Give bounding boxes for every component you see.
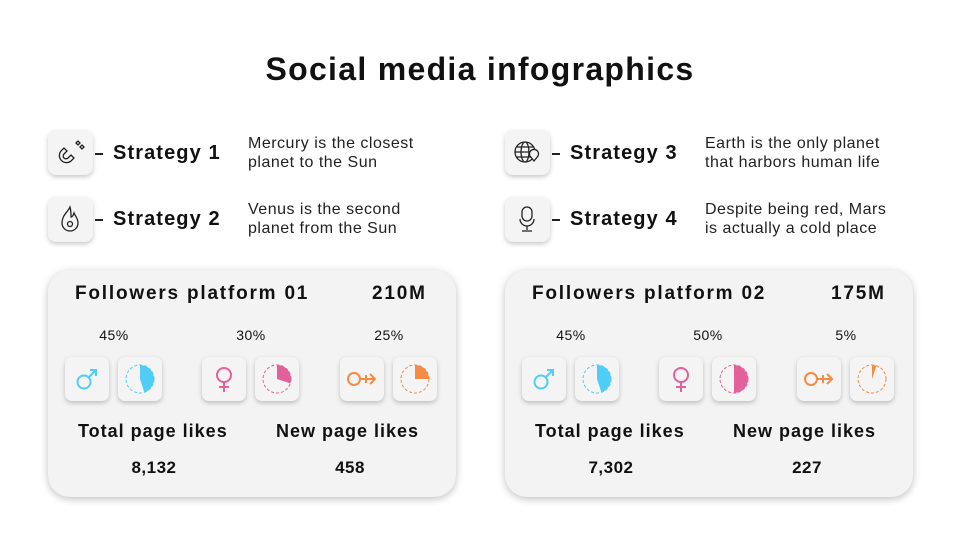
- panel: platform 01: [48, 270, 456, 497]
- icon: other: [340, 357, 384, 401]
- strategy 4: is actually a cold place: [705, 220, 877, 237]
- heading: Followers platform 02: [532, 283, 766, 304]
- icon: flame: [48, 197, 93, 242]
- icon: male: [522, 357, 566, 401]
- panel: platform 02: [505, 270, 913, 497]
- panel: platform 01: 458: [335, 458, 365, 477]
- strategy 3: that harbors human life: [705, 154, 880, 171]
- strategy 4: Despite being red, Mars: [705, 201, 886, 218]
- pie 45: [118, 357, 162, 401]
- panel: platform 02: 227: [792, 458, 822, 477]
- icon: magnet: [48, 130, 93, 175]
- panel: platform 01: 25%: [374, 327, 404, 343]
- strategy 3: Strategy 3: [570, 142, 678, 164]
- strategy 4: Strategy 4: [570, 208, 678, 230]
- strategy 2: [46, 196, 401, 246]
- panel: platform 02: 50%: [693, 327, 723, 343]
- panel: platform 01: 45%: [99, 327, 129, 343]
- strategy 1: [46, 130, 414, 180]
- pie 45: [575, 357, 619, 401]
- strategy 2: planet from the Sun: [248, 220, 397, 237]
- strategy 4: [502, 196, 886, 246]
- icon: female: [202, 357, 246, 401]
- icon: other: [797, 357, 841, 401]
- icon: female: [659, 357, 703, 401]
- strategy 1: Strategy 1: [113, 142, 221, 164]
- strategy 2: Strategy 2: [113, 208, 221, 230]
- strategy 3: [502, 130, 880, 180]
- pie 5: [850, 357, 894, 401]
- panel: platform 02: New page likes: [733, 421, 876, 441]
- value: 175M: [831, 283, 886, 304]
- panel: platform 02: 5%: [835, 327, 857, 343]
- panel: platform 01: 30%: [236, 327, 266, 343]
- panel: platform 02: 7,302: [588, 458, 634, 477]
- icon: microphone: [505, 197, 550, 242]
- pie 25: [393, 357, 437, 401]
- panel: platform 01: New page likes: [276, 421, 419, 441]
- pie 30: [255, 357, 299, 401]
- pie 50: [712, 357, 756, 401]
- strategy 3: Earth is the only planet: [705, 135, 880, 152]
- strategy 2: Venus is the second: [248, 201, 401, 218]
- panel: platform 02: 45%: [556, 327, 586, 343]
- strategy 1: planet to the Sun: [248, 154, 377, 171]
- panel: platform 02: Total page likes: [535, 421, 685, 441]
- title: Social media infographics: [265, 51, 695, 87]
- icon: male: [65, 357, 109, 401]
- panel: platform 01: 8,132: [131, 458, 177, 477]
- icon: globe: [505, 130, 550, 175]
- strategy 1: Mercury is the closest: [248, 135, 414, 152]
- panel: platform 01: Total page likes: [78, 421, 228, 441]
- value: 210M: [372, 283, 427, 304]
- heading: Followers platform 01: [75, 283, 309, 304]
